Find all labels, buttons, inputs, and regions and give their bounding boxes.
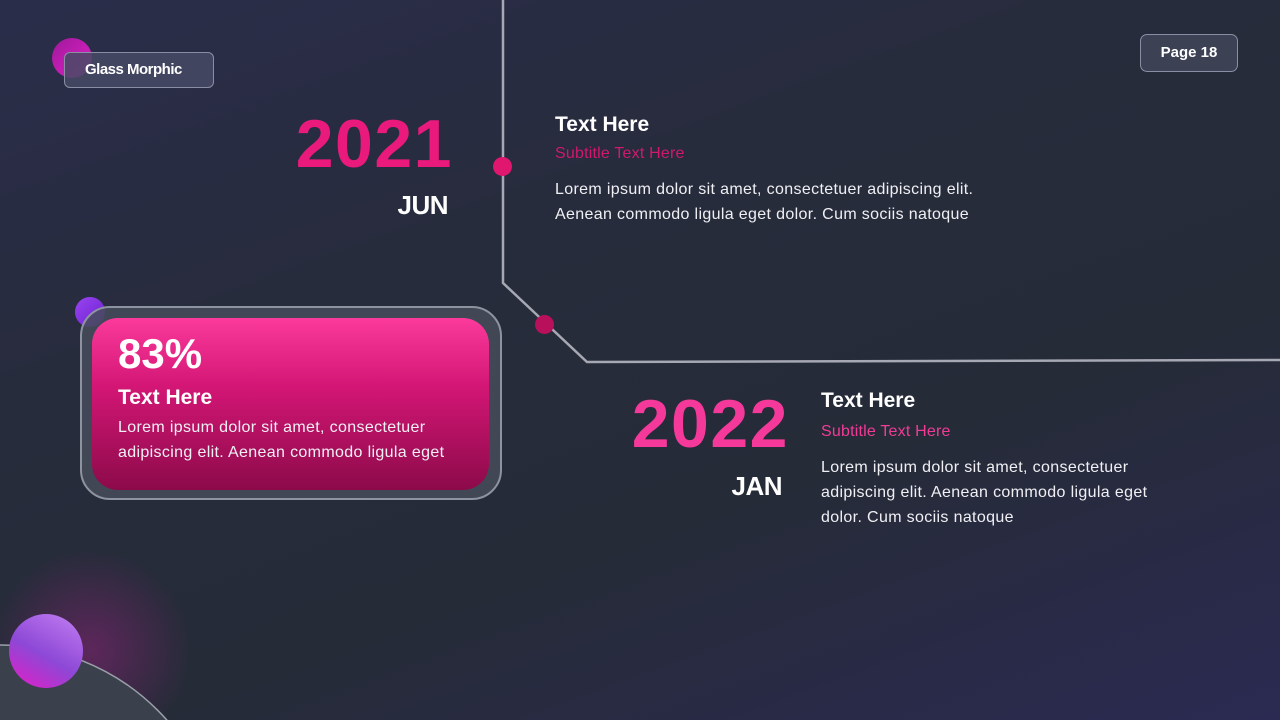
card body: adipiscing elit. Aenean commodo ligula eget	[118, 444, 444, 461]
text block 2021: Text Here	[555, 113, 649, 136]
card body: Lorem ipsum dolor sit amet, consectetuer	[118, 419, 425, 436]
text block 2021: Aenean commodo ligula eget dolor. Cum sociis natoque	[555, 206, 969, 223]
logo label	[64, 52, 214, 88]
page badge	[1140, 34, 1238, 72]
2022 year block	[632, 386, 789, 501]
text block 2021: Subtitle Text Here	[555, 145, 685, 162]
month JAN: JAN	[731, 471, 782, 501]
timeline dot 1	[493, 157, 512, 176]
glass frame	[80, 306, 502, 500]
timeline dot 2	[535, 315, 554, 334]
icon: logo circle	[52, 38, 92, 78]
logo badge	[52, 38, 214, 88]
year 2022: 2022	[632, 386, 789, 462]
text block 2022: adipiscing elit. Aenean commodo ligula eget	[821, 484, 1147, 501]
2021 year block	[296, 106, 453, 220]
month JUN: JUN	[397, 190, 448, 220]
text block 2021	[555, 113, 973, 223]
icon: purple sphere	[75, 297, 105, 327]
text block 2022: Text Here	[821, 389, 915, 412]
logo label: Glass Morphic	[85, 61, 182, 78]
icon: sphere bottom left	[9, 614, 83, 688]
pink card	[92, 318, 489, 490]
stat 83%: 83%	[118, 330, 202, 377]
year 2021: 2021	[296, 106, 453, 182]
text block 2022: Subtitle Text Here	[821, 423, 951, 440]
card body	[118, 419, 444, 461]
text block 2022: Lorem ipsum dolor sit amet, consectetuer	[821, 459, 1128, 476]
text block 2022: dolor. Cum sociis natoque	[821, 509, 1014, 526]
text block 2021: Lorem ipsum dolor sit amet, consectetuer adipiscing elit.	[555, 181, 973, 198]
card heading: Text Here	[118, 386, 212, 409]
text block 2022	[821, 389, 1147, 526]
panel: 83% card	[75, 297, 502, 500]
page badge: Page 18	[1161, 44, 1217, 61]
